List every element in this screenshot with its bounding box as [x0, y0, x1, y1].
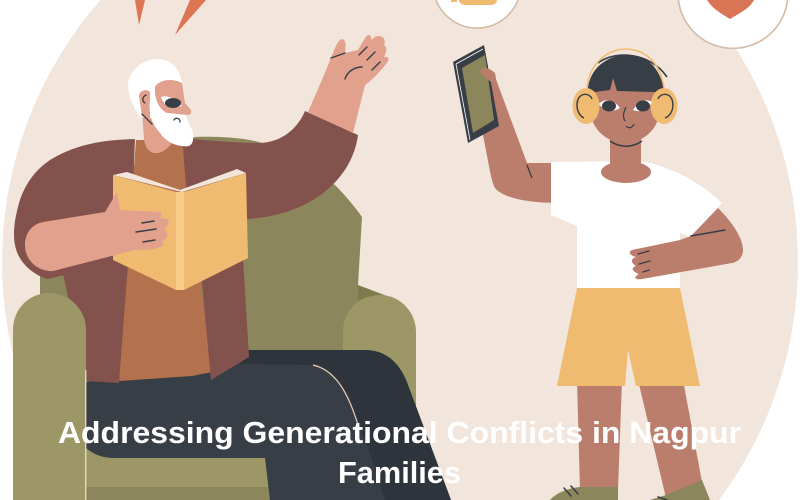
boy's shirt	[551, 161, 722, 290]
raised hand creases	[331, 47, 380, 79]
armchair	[40, 137, 416, 500]
man's undershirt	[119, 140, 212, 381]
speech spikes	[135, 0, 206, 35]
boy's neck and head	[572, 49, 678, 183]
man's head	[128, 59, 193, 153]
boy's shorts	[557, 288, 700, 386]
boy's legs	[577, 380, 702, 498]
title: Families	[338, 455, 461, 490]
icon: heart bubble	[678, 0, 788, 48]
man's forearm and hand	[25, 192, 169, 271]
man's jacket	[14, 111, 358, 383]
book	[113, 169, 248, 290]
icon: small chat bubble	[436, 0, 518, 28]
armchair left armrest	[13, 293, 86, 500]
title	[58, 415, 741, 490]
boy's shoes	[550, 480, 710, 500]
boy's raised arm	[483, 68, 560, 203]
phone	[453, 45, 499, 143]
man's trousers	[86, 350, 451, 500]
title: Addressing Generational Conflicts in Nagpur	[58, 415, 741, 450]
boy's lower arm	[630, 208, 743, 279]
man's raised arm	[308, 35, 388, 133]
